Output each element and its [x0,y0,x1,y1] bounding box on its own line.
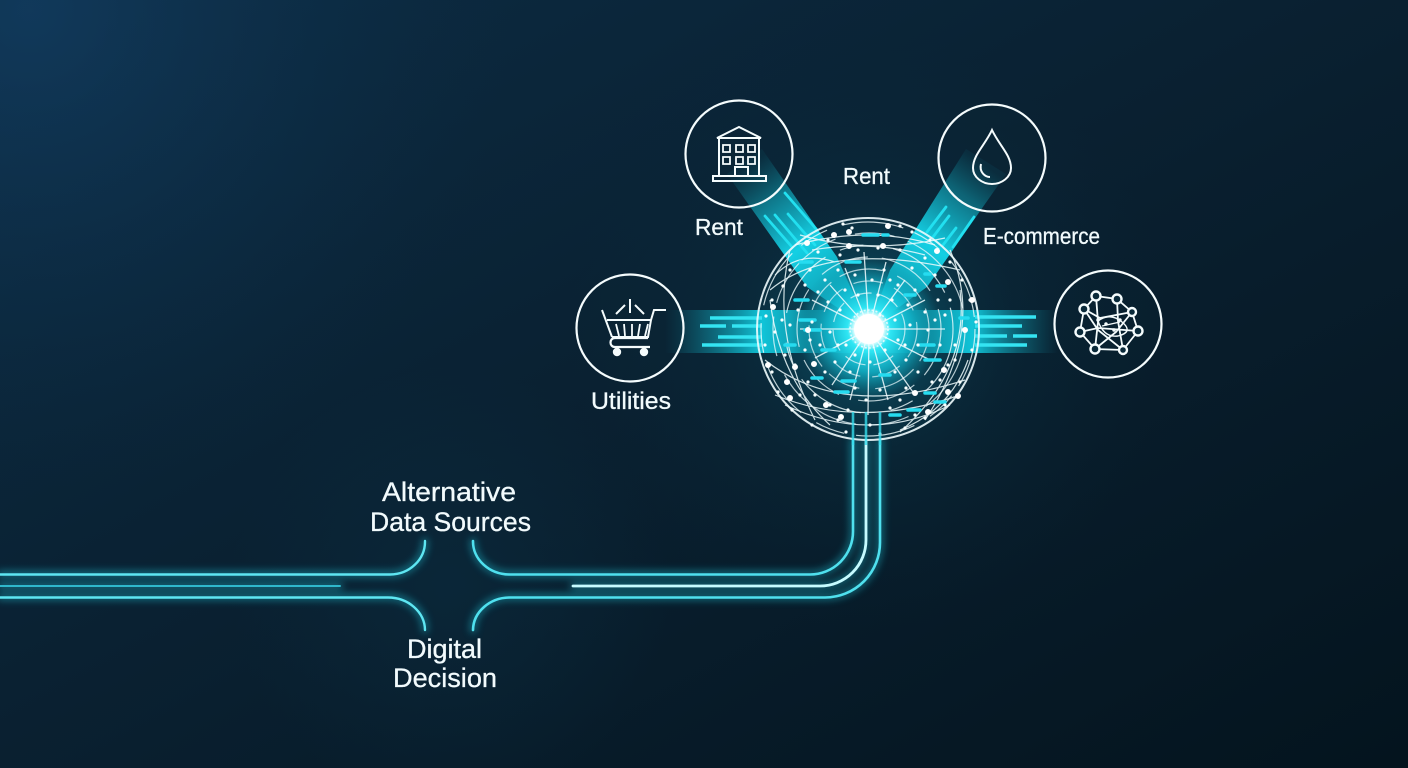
central data sphere [757,218,979,440]
label: Digital Decision: Decision [393,663,497,693]
left branch lines [0,541,425,574]
icon: shopping cart [576,274,684,382]
icon: network [1054,270,1162,378]
beam: water drop [869,149,1006,329]
icon: building [686,100,792,208]
label: Alternative Data Sources: Data Sources [370,507,531,537]
glow under lines [0,440,880,630]
sphere radial spokes [800,252,945,415]
beam: network [868,310,1058,353]
label: Digital Decision: Digital [407,634,482,664]
label: Utilities: Utilities [591,388,671,415]
label: Rent top: Rent [843,163,891,189]
sphere white dots large [768,226,972,417]
label: Digital Decision [393,634,497,693]
sphere rings [757,218,979,440]
pipeline lines [0,440,880,630]
label: E-commerce: E-commerce [983,223,1100,249]
label: Alternative Data Sources [370,477,531,537]
sphere core [797,257,941,401]
icon: water drop [938,104,1046,212]
sphere white dots small [765,224,976,434]
sphere centre light [854,314,884,344]
right branch lines [473,440,853,574]
beam: shopping cart [665,310,868,353]
sphere cyan dashes [785,235,968,415]
vertical line highlight under sphere [853,412,880,445]
sphere backing [758,218,980,440]
connector beams from icons to sphere [665,149,1058,353]
label: Rent: Rent [695,214,744,240]
beam: building [727,149,869,329]
label: Alternative Data Sources: Alternative [382,477,516,507]
